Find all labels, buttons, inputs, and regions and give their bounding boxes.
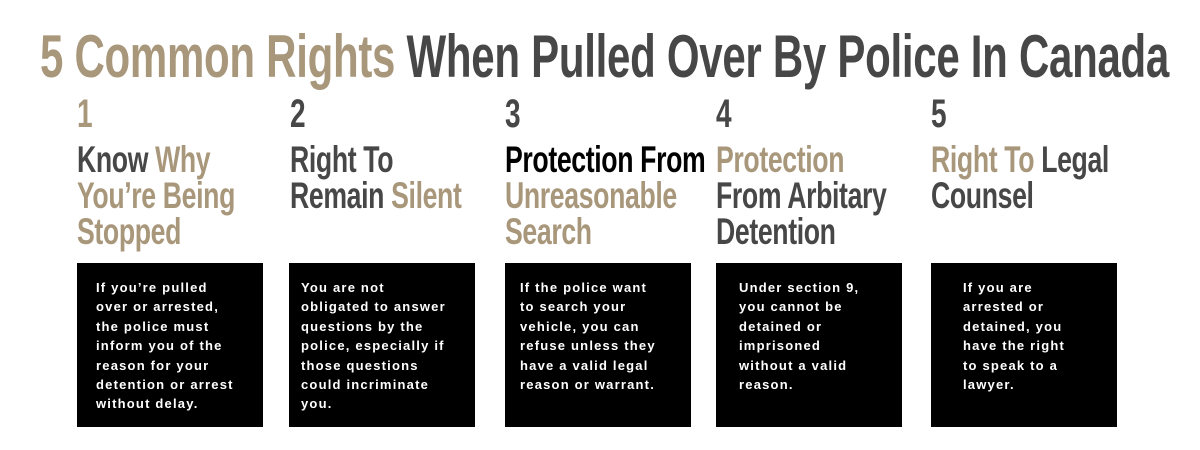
text box 5: detained, you (963, 319, 1062, 334)
number 5: 5 (931, 92, 947, 136)
title: 5 Common Rights When Pulled Over By Police In Canada (40, 23, 1169, 90)
heading 2: Right To (290, 139, 393, 180)
column 5 (931, 92, 1109, 216)
text box 3: have a valid legal (520, 358, 649, 373)
text box 5: lawyer. (963, 377, 1015, 392)
text box 4: you cannot be (739, 299, 843, 314)
heading 3: Search (505, 211, 592, 252)
text box 4: detained or (739, 319, 822, 334)
text box 5: have the right (963, 338, 1065, 353)
text box 5: to speak to a (963, 358, 1058, 373)
heading 3: Protection From (505, 139, 705, 180)
heading 1: Know Why (77, 139, 210, 180)
text box 4 (716, 263, 902, 427)
heading 1: Stopped (77, 211, 181, 252)
text box 1: inform you of the (96, 338, 223, 353)
heading 4: Detention (716, 211, 836, 252)
text box 1: detention or arrest (96, 377, 234, 392)
text box 1 (77, 263, 263, 427)
text box 4: imprisoned (739, 338, 821, 353)
heading 3: Unreasonable (505, 175, 677, 216)
text box 2: you. (301, 396, 333, 411)
heading 5 (931, 139, 1109, 216)
text box 1: the police must (96, 319, 209, 334)
text box 3: vehicle, you can (520, 319, 640, 334)
heading 2: Remain Silent (290, 175, 461, 216)
text box 4: reason. (739, 377, 794, 392)
column 2 (290, 92, 462, 216)
text box 1: If you’re pulled (96, 280, 208, 295)
text box 1: without delay. (96, 396, 199, 411)
text box 2: those questions (301, 358, 419, 373)
text box 2 (289, 263, 475, 427)
text box 2: could incriminate (301, 377, 429, 392)
text box 1: over or arrested, (96, 299, 219, 314)
column 4 (716, 92, 887, 252)
heading 1: You’re Being (77, 175, 235, 216)
text box 5 (931, 263, 1117, 427)
text box 3: refuse unless they (520, 338, 656, 353)
text box 3: to search your (520, 299, 626, 314)
text box 5: If you are (963, 280, 1033, 295)
text box 3: If the police want (520, 280, 647, 295)
heading 5: Counsel (931, 175, 1034, 216)
column 3 (505, 92, 705, 252)
heading 4 (716, 139, 887, 252)
heading 1 (77, 139, 235, 252)
column 1 (77, 92, 235, 252)
number 2: 2 (290, 92, 306, 136)
text box 3: reason or warrant. (520, 377, 655, 392)
text box 4: Under section 9, (739, 280, 859, 295)
number 3: 3 (505, 92, 521, 136)
number 1: 1 (77, 92, 93, 136)
heading 2 (290, 139, 462, 216)
text box 4: without a valid (739, 358, 847, 373)
text box 2: questions by the (301, 319, 424, 334)
text box 2: police, especially if (301, 338, 445, 353)
text box 3 (505, 263, 691, 427)
heading 5: Right To Legal (931, 139, 1109, 180)
text box 2: You are not (301, 280, 385, 295)
heading 3 (505, 139, 705, 252)
text box 2: obligated to answer (301, 299, 446, 314)
number 4: 4 (716, 92, 732, 136)
heading 4: Protection (716, 139, 844, 180)
heading 4: From Arbitary (716, 175, 886, 216)
text box 5: arrested or (963, 299, 1044, 314)
text box 1: reason for your (96, 358, 209, 373)
